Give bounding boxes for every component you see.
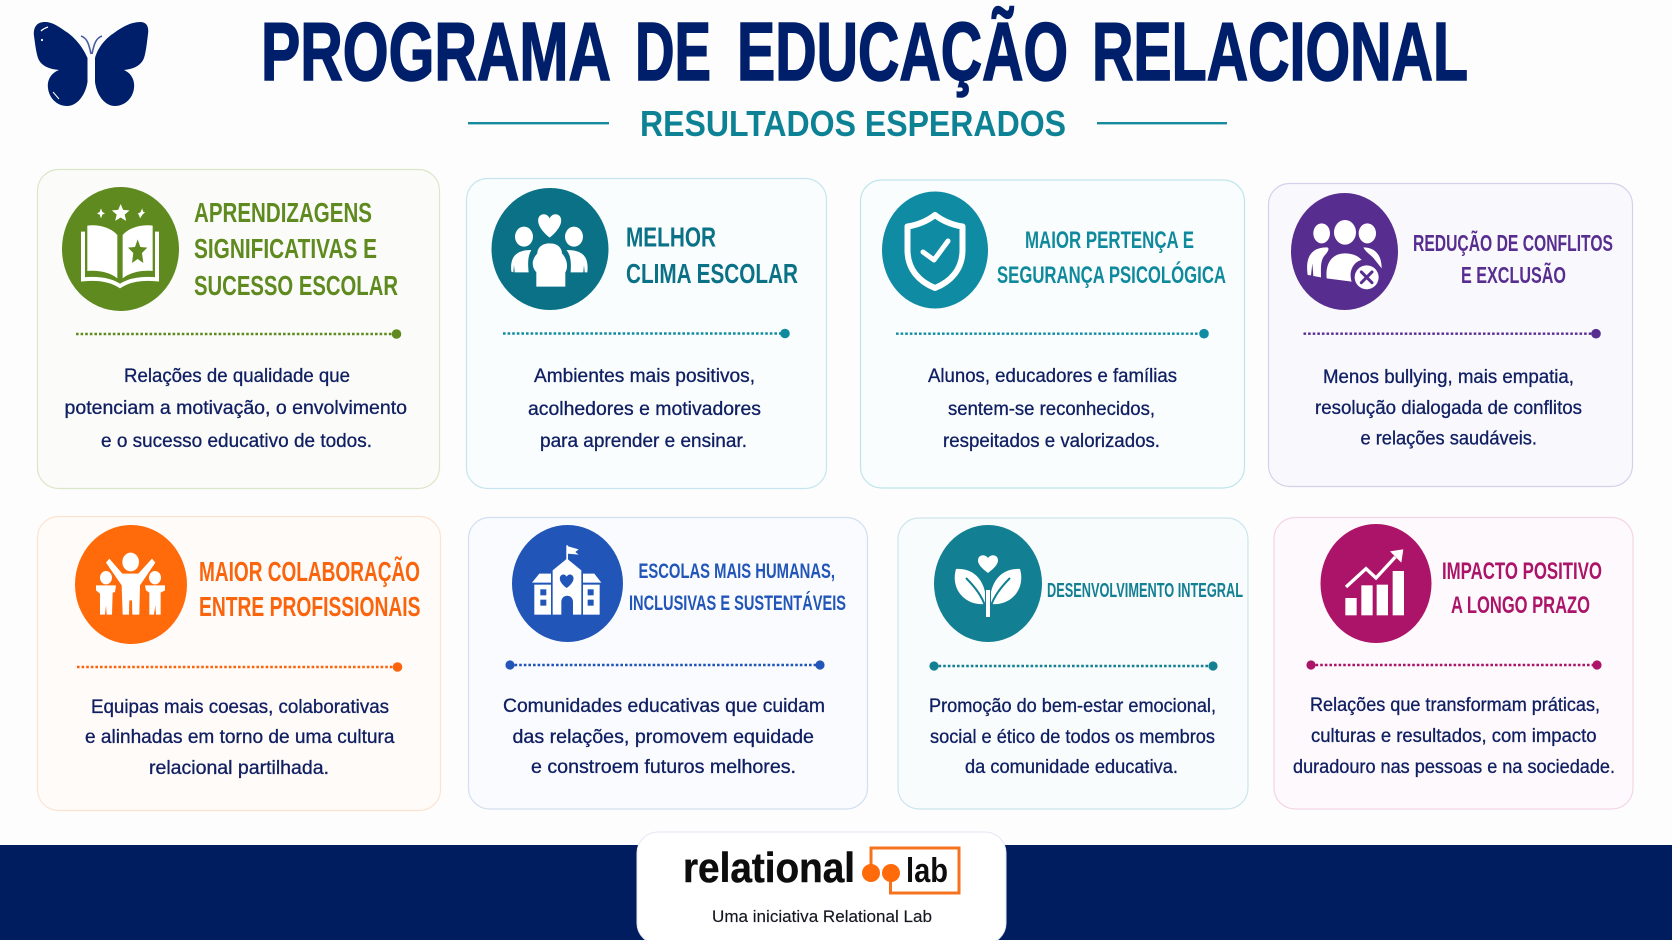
title: RELACIONAL (1092, 5, 1468, 98)
body text (503, 695, 825, 778)
heading: IMPACTO POSITIVO (1442, 558, 1602, 585)
icon: butterfly logo (34, 22, 148, 106)
icon: three people arms raised (75, 525, 187, 644)
heading: ENTRE PROFISSIONAIS (199, 591, 420, 622)
body text: Equipas mais coesas, colaborativas (91, 696, 389, 718)
heading (1413, 229, 1613, 288)
body text: e constroem futuros melhores. (531, 756, 796, 778)
heading: MAIOR COLABORAÇÃO (199, 556, 420, 587)
body text: Promoção do bem-estar emocional, (929, 695, 1216, 717)
title: EDUCAÇÃO (737, 5, 1068, 98)
body text (929, 695, 1216, 778)
body text: sentem-se reconhecidos, (948, 398, 1155, 420)
heading (629, 559, 846, 615)
body text: potenciam a motivação, o envolvimento (64, 397, 407, 419)
heading: INCLUSIVAS E SUSTENTÁVEIS (629, 590, 846, 615)
logo mark (683, 844, 959, 893)
heading: MAIOR PERTENÇA E (1025, 227, 1194, 254)
heading: ESCOLAS MAIS HUMANAS, (638, 559, 835, 583)
logo card: relational lab (637, 832, 1006, 941)
heading (997, 227, 1226, 289)
subtitle: RESULTADOS ESPERADOS (640, 103, 1066, 144)
icon: shield with check (882, 192, 988, 308)
panel: maior colaboração (38, 516, 440, 810)
logo mark: relational (683, 844, 855, 891)
panel: escolas mais humanas (468, 518, 868, 809)
panel: aprendizagens significativas (38, 170, 440, 488)
icon: sprout with heart (934, 525, 1042, 642)
heading: CLIMA ESCOLAR (626, 258, 798, 289)
body text: da comunidade educativa. (965, 756, 1178, 778)
body text: e relações saudáveis. (1360, 428, 1537, 450)
body text: Comunidades educativas que cuidam (503, 695, 825, 717)
icon: rising bar chart (1320, 524, 1432, 643)
icon: people with x badge (1291, 193, 1398, 310)
footer bar (0, 845, 1672, 940)
body text: respeitados e valorizados. (943, 430, 1160, 452)
heading: E EXCLUSÃO (1461, 261, 1566, 288)
heading (1442, 558, 1602, 619)
panel: maior pertença (860, 180, 1244, 488)
icon: group of people with heart (492, 188, 608, 310)
body text: social e ético de todos os membros (930, 726, 1215, 748)
body text: Relações de qualidade que (124, 365, 350, 387)
icon: school with heart (512, 525, 623, 642)
heading: MELHOR (626, 222, 716, 252)
body text (928, 365, 1177, 452)
heading: A LONGO PRAZO (1451, 592, 1590, 619)
heading (199, 556, 420, 622)
heading (194, 197, 398, 301)
body text (85, 696, 395, 779)
body text: Alunos, educadores e famílias (928, 365, 1177, 387)
body text: e o sucesso educativo de todos. (101, 430, 372, 452)
body text (528, 365, 761, 452)
logo mark: lab (906, 852, 948, 890)
title: DE (635, 5, 711, 98)
body text: Menos bullying, mais empatia, (1323, 366, 1574, 388)
panel: melhor clima escolar (466, 178, 826, 488)
panel: desenvolvimento integral (898, 518, 1248, 809)
heading: SEGURANÇA PSICOLÓGICA (997, 261, 1226, 289)
title: PROGRAMA (261, 5, 611, 98)
body text: relacional partilhada. (149, 757, 329, 779)
body text: Ambientes mais positivos, (534, 365, 755, 387)
body text (1315, 366, 1582, 450)
body text: culturas e resultados, com impacto (1311, 725, 1597, 747)
icon: open book with stars (62, 187, 179, 311)
heading: SUCESSO ESCOLAR (194, 270, 398, 301)
heading (626, 222, 798, 289)
heading: SIGNIFICATIVAS E (194, 233, 377, 264)
body text (1293, 694, 1615, 778)
body text: duradouro nas pessoas e na sociedade. (1293, 756, 1615, 778)
heading: DESENVOLVIMENTO INTEGRAL (1047, 579, 1243, 602)
body text: das relações, promovem equidade (512, 726, 814, 748)
heading: APRENDIZAGENS (194, 197, 372, 228)
body text: Relações que transformam práticas, (1310, 694, 1600, 716)
body text: acolhedores e motivadores (528, 398, 761, 420)
panel: impacto positivo (1274, 518, 1633, 809)
body text: para aprender e ensinar. (540, 430, 747, 452)
body text: resolução dialogada de conflitos (1315, 397, 1582, 419)
body text (64, 365, 407, 452)
body text: e alinhadas em torno de uma cultura (85, 726, 395, 748)
tagline: Uma iniciativa Relational Lab (712, 907, 932, 926)
panel: redução de conflitos (1268, 184, 1632, 486)
title (261, 5, 1468, 98)
